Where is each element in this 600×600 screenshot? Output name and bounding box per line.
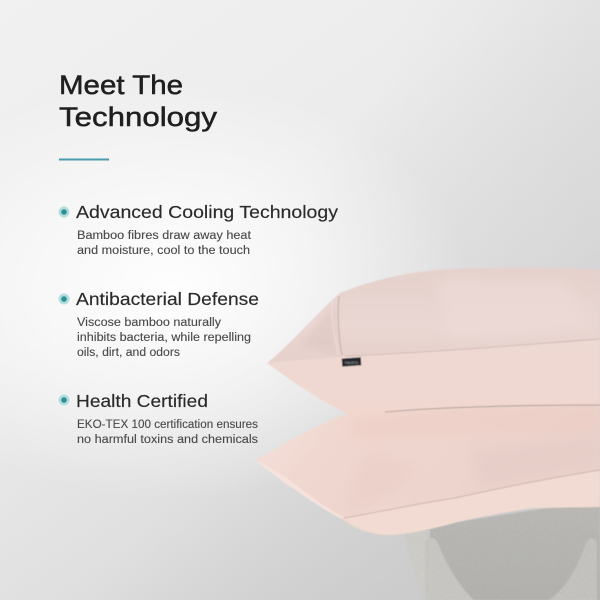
- body text: oils, dirt, and odors: [77, 347, 180, 359]
- body text: [77, 317, 251, 359]
- heading: Advanced Cooling Technology: [76, 202, 338, 222]
- feature: antibacterial: [58, 289, 259, 359]
- title: Meet The: [59, 70, 183, 100]
- shaded fold: [345, 448, 420, 515]
- band under top pillow: [350, 409, 600, 440]
- shade on left corner: [300, 305, 338, 355]
- title underline: [59, 158, 109, 160]
- top pillow: [267, 268, 600, 415]
- body text: inhibits bacteria, while repelling: [77, 332, 251, 344]
- icon: bullet: [58, 294, 70, 304]
- flange seam: [338, 296, 342, 355]
- highlights: [440, 279, 590, 340]
- body text: [77, 230, 252, 257]
- stone stool: [404, 500, 600, 600]
- bottom pillow: [255, 405, 600, 535]
- black label tag: FAUSTO: [345, 360, 358, 365]
- feature: certified: [58, 391, 258, 446]
- feature: cooling: [58, 202, 338, 257]
- stool right leg: [549, 538, 597, 600]
- shadow between pillows: [385, 405, 600, 412]
- lower hem band: [345, 470, 600, 535]
- pillow lower panel: [267, 339, 600, 415]
- icon: bullet: [58, 394, 70, 406]
- icon: bullet: [58, 206, 70, 218]
- body text: Viscose bamboo naturally: [77, 317, 221, 329]
- seam: [344, 470, 600, 518]
- right shade: [470, 435, 600, 490]
- horizontal seam: [345, 339, 600, 356]
- body text: [77, 419, 258, 446]
- concrete grain: [404, 500, 600, 600]
- heading: Health Certified: [76, 391, 208, 411]
- black label tag: [342, 357, 361, 367]
- pillow upper panel: [267, 268, 600, 363]
- stool body: [404, 500, 600, 600]
- body text: EKO-TEX 100 certification ensures: [77, 419, 258, 431]
- stool left side: [404, 530, 430, 600]
- title: Technology: [59, 102, 218, 132]
- heading: Antibacterial Defense: [76, 289, 259, 309]
- pillow body: [255, 405, 600, 535]
- body text: and moisture, cool to the touch: [77, 245, 250, 257]
- body text: no harmful toxins and chemicals: [77, 434, 258, 446]
- left hem: [255, 460, 345, 518]
- stool left leg: [425, 538, 474, 600]
- title: [59, 70, 218, 132]
- body text: Bamboo fibres draw away heat: [77, 230, 252, 242]
